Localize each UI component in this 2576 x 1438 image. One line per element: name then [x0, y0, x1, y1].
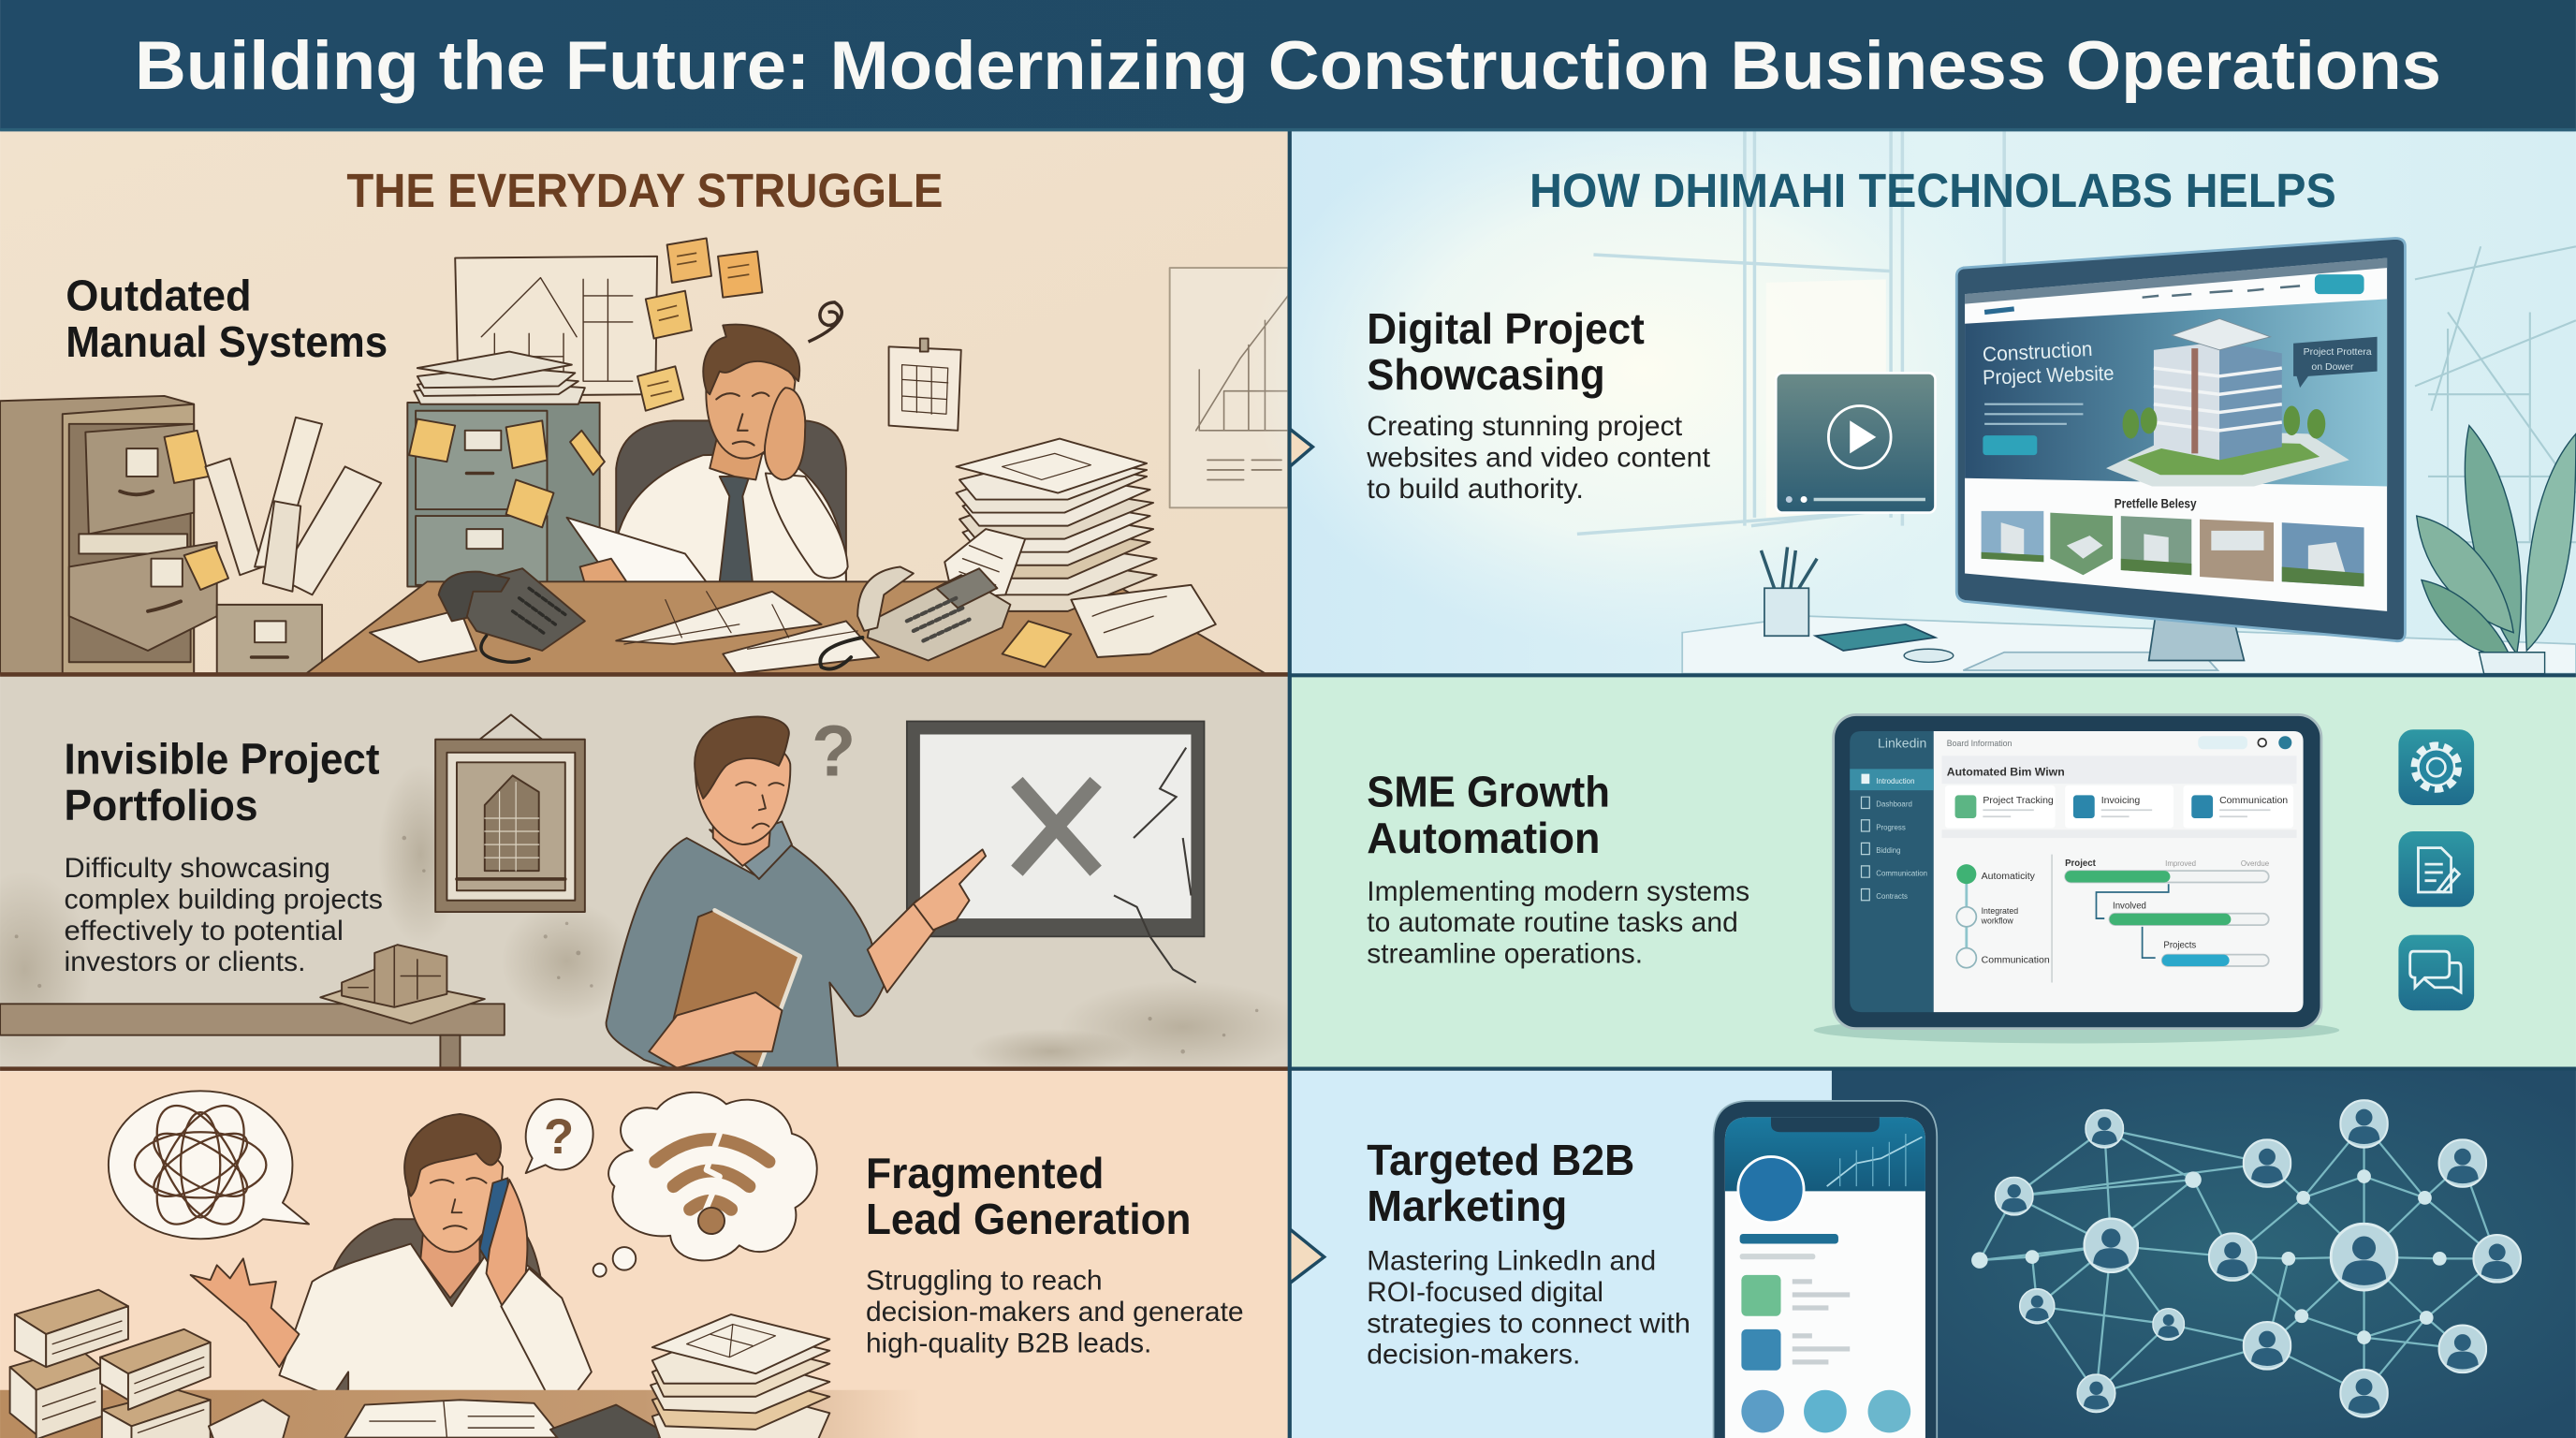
- screen: [1965, 258, 2387, 611]
- sidebar text: Dashboard: [1876, 800, 1912, 809]
- tablet dashboard: [1834, 714, 2321, 1029]
- text block: targeted b2b marketing: decision-makers.: [1367, 1340, 1580, 1371]
- rolled blueprints in a bin: [205, 418, 381, 674]
- arrow: row 1: [1290, 429, 1312, 466]
- right column dividers: [1290, 130, 2576, 1438]
- text block: targeted b2b marketing: ROI-focused digital: [1367, 1277, 1603, 1308]
- phone screen: [1725, 1117, 1925, 1438]
- text block: fragmented lead generation: decision-makers and generate: [866, 1297, 1244, 1328]
- sheet of paper and hand: [567, 518, 735, 620]
- title strip: Automated Bim Wiwn: [1947, 765, 2065, 778]
- feature cards: Communication: [2219, 795, 2288, 806]
- sticky notes on the wall: [637, 238, 762, 411]
- neck: [710, 440, 766, 479]
- lower left box: [10, 1347, 102, 1438]
- portfolio thumbnails: [1982, 511, 2364, 587]
- hair: [695, 717, 789, 799]
- sidebar text: [1850, 736, 1934, 901]
- gantt bars: Involved: [2113, 902, 2146, 912]
- holding hand: [649, 992, 782, 1068]
- worried man at desk: [567, 325, 848, 620]
- floors: [2154, 368, 2282, 431]
- heading: the everyday struggle: THE EVERYDAY STRUGGLE: [346, 164, 943, 217]
- speech tag: Project Prottera: [2304, 346, 2372, 358]
- tall paper stack: [956, 439, 1157, 611]
- text block: invisible project portfolios: Portfolios: [65, 781, 258, 829]
- mouse: [1904, 649, 1954, 662]
- timeline: Integrated: [1982, 906, 2018, 916]
- plant pot: [2479, 653, 2545, 674]
- side table with building model: [0, 945, 505, 1070]
- damp stains: [0, 764, 1306, 1075]
- text block: sme growth automation: SME Growth: [1367, 768, 1610, 816]
- header bar: [0, 0, 2576, 131]
- text block: invisible project portfolios: effectively to potential: [65, 916, 344, 946]
- text block: sme growth automation: Implementing modern systems: [1367, 876, 1749, 907]
- timeline: [1956, 855, 2052, 983]
- panel: targeted b2b marketing row 3: [1290, 1071, 1835, 1438]
- framed building picture: [435, 714, 585, 912]
- text block: targeted b2b marketing: Marketing: [1367, 1181, 1567, 1230]
- icon: document and pen: [2398, 831, 2474, 907]
- desk, row 3: [0, 1390, 920, 1438]
- tablet shadow: [1814, 1017, 2339, 1043]
- text block: sme growth automation: Automation: [1367, 814, 1600, 862]
- gantt bars: Projects: [2163, 941, 2196, 951]
- neck: [713, 805, 772, 866]
- text block: outdated manual systems: Manual Systems: [66, 317, 388, 366]
- text block: outdated manual systems: Outdated: [66, 271, 252, 320]
- cracks: [1114, 748, 1196, 983]
- face: [431, 1178, 487, 1229]
- text block: digital project showcasing: to build authority.: [1367, 474, 1584, 505]
- stand: [2149, 616, 2244, 661]
- hair: [404, 1114, 501, 1196]
- shirt: [279, 1244, 588, 1438]
- text block: digital project showcasing: Digital Project: [1367, 304, 1645, 353]
- head: [706, 357, 795, 459]
- profile banner with chart: [1725, 1117, 1925, 1191]
- text block: sme growth automation: to automate routine tasks and: [1367, 907, 1738, 938]
- shirt: [611, 453, 846, 581]
- icon: grey X: [1017, 782, 1096, 871]
- icon: stress squiggle: [809, 302, 842, 342]
- title: Building the Future: Modernizing Construction Business Operations: [135, 28, 2441, 104]
- timeline: workflow: [1981, 916, 2013, 925]
- sticky notes on cabinet: [165, 431, 228, 590]
- man on the phone: [191, 1114, 592, 1438]
- text block: targeted b2b marketing: [1367, 1136, 1690, 1371]
- paper stack on cabinet: [414, 352, 585, 404]
- panel: sme growth automation row 2: [1290, 677, 2576, 1070]
- window panes: [1766, 279, 1886, 518]
- text block: targeted b2b marketing: Targeted B2B: [1367, 1136, 1634, 1184]
- desk phone, right: [820, 566, 1010, 669]
- panel: digital project showcasing row 1: [1249, 91, 2576, 675]
- speech bubble with tangle: [109, 1091, 309, 1239]
- pointing hand: [914, 849, 986, 930]
- wall blueprint at right edge: [1170, 268, 1288, 507]
- text block: targeted b2b marketing: Mastering LinkedIn and: [1367, 1246, 1656, 1277]
- column and row dividers: [0, 674, 1288, 1069]
- frame: [1956, 238, 2405, 641]
- feature cards: Invoicing: [2101, 795, 2140, 806]
- blue phone: [480, 1178, 509, 1265]
- text block: digital project showcasing: Creating stunning project: [1367, 411, 1683, 442]
- grey filing cabinet with notes: [407, 352, 605, 587]
- icon: gear: [2398, 729, 2474, 805]
- speech tag: on Dower: [2311, 361, 2354, 373]
- feature cards: [1945, 785, 2293, 829]
- profile lines: [1740, 1234, 1910, 1432]
- desk: [304, 581, 1268, 675]
- face: [736, 782, 783, 829]
- gantt bars: Overdue: [2241, 859, 2270, 868]
- gantt bars: [2065, 858, 2270, 966]
- chair: [326, 1219, 546, 1397]
- book: [674, 910, 800, 1068]
- text block: sme growth automation: [1367, 768, 1749, 969]
- sidebar text: Introduction: [1876, 777, 1914, 785]
- filing cabinet, left: [0, 396, 228, 674]
- portfolio heading: Pretfelle Belesy: [2115, 495, 2197, 510]
- icon: broken wifi: [655, 1139, 768, 1210]
- main area: [1934, 731, 2304, 1012]
- heading: how dhimahi technolabs helps: HOW DHIMAHI TECHNOLABS HELPS: [1530, 164, 2336, 217]
- head: [695, 738, 790, 844]
- panel: everyday struggle row 1: [0, 130, 1290, 675]
- rolled plan on desk: [1071, 585, 1216, 657]
- notch: [1771, 1117, 1880, 1132]
- tablet on desk: [1815, 624, 1935, 651]
- speech tag: [2293, 337, 2378, 388]
- sidebar text: Communication: [1876, 869, 1927, 877]
- head: [407, 1144, 503, 1252]
- sleeve of raised arm: [766, 473, 848, 579]
- right upper box: [100, 1329, 211, 1410]
- phone with profile: [1714, 1101, 1937, 1438]
- raised open hand: [191, 1258, 299, 1367]
- gantt bars: Project: [2065, 858, 2097, 869]
- hero text: Project Website: [1983, 361, 2115, 389]
- text block: invisible project portfolios: Difficulty showcasing: [65, 853, 330, 884]
- hero text: [1982, 337, 2115, 389]
- raised hand: [765, 388, 805, 479]
- face: [716, 392, 768, 446]
- trees: [2123, 405, 2325, 439]
- sidebar text: Linkedin: [1878, 736, 1926, 751]
- text block: fragmented lead generation: Fragmented: [866, 1149, 1104, 1197]
- text block: digital project showcasing: [1366, 304, 1711, 505]
- timeline: Automaticity: [1982, 871, 2036, 882]
- hair: [703, 325, 799, 394]
- top drawer: [85, 424, 194, 534]
- paper plan, calculator and cards on desk: [209, 1400, 666, 1438]
- text block: sme growth automation: streamline operations.: [1367, 938, 1643, 969]
- text block: invisible project portfolios: [65, 735, 383, 977]
- keyboard: [1963, 653, 2217, 670]
- sidebar text: Progress: [1876, 823, 1906, 831]
- building faces: [2154, 342, 2219, 460]
- plot: [2106, 431, 2349, 486]
- broken screen with X: [907, 721, 1204, 983]
- icon: chat bubbles: [2398, 935, 2474, 1010]
- upper left box: [15, 1290, 128, 1367]
- sidebar text: Contracts: [1876, 892, 1908, 901]
- question speech bubble: [526, 1099, 593, 1173]
- video player: [1776, 373, 1935, 513]
- question mark: ?: [812, 711, 856, 791]
- timeline: Communication: [1982, 954, 2050, 965]
- text block: invisible project portfolios: Invisible Project: [65, 735, 379, 784]
- nav: [1984, 274, 2364, 312]
- neck: [420, 1224, 480, 1298]
- top bar: [1947, 736, 2291, 749]
- text block: digital project showcasing: websites and video content: [1366, 442, 1711, 473]
- wall calendar: [889, 339, 961, 431]
- hand and forearm to phone: [487, 1180, 559, 1328]
- question speech bubble: ?: [544, 1109, 574, 1165]
- text block: fragmented lead generation: Lead Generation: [866, 1195, 1191, 1243]
- text block: fragmented lead generation: Struggling to reach: [866, 1266, 1103, 1297]
- confused man pointing: [607, 717, 986, 1070]
- 3D building on a plot: [2106, 318, 2349, 486]
- bottom open drawer: [69, 534, 217, 651]
- sidebar: [1850, 731, 1934, 1012]
- background blueprint scaffold lines: [2415, 246, 2576, 542]
- text block: outdated manual systems: [66, 271, 388, 366]
- shirt and pointing arm: [607, 838, 884, 1070]
- separator strip: [1942, 829, 2297, 838]
- thought cloud with broken wifi: [593, 1093, 817, 1277]
- hero text: Construction: [1982, 337, 2093, 366]
- scattered blueprints on desk: [370, 592, 879, 674]
- desk with keyboard: [1682, 616, 2576, 674]
- top bar: [1965, 258, 2387, 304]
- right lower box: [102, 1390, 211, 1438]
- paper receipt: [944, 529, 1025, 598]
- wall blueprint with house sketch: [455, 257, 657, 396]
- text block: invisible project portfolios: complex building projects: [65, 885, 383, 916]
- chair: [616, 420, 846, 581]
- tie: [720, 477, 753, 581]
- roof: [2172, 318, 2271, 350]
- text block: fragmented lead generation: [866, 1149, 1244, 1358]
- pen cup: [1761, 547, 1817, 636]
- sticky notes on grey cabinet: [409, 419, 605, 527]
- hero lines and button: [1983, 404, 2083, 455]
- panel: invisible project portfolios row 2: [0, 675, 1306, 1075]
- title strip: [1942, 756, 2297, 784]
- plant: [2417, 426, 2576, 674]
- avatar: [1738, 1157, 1804, 1223]
- network graph: [1971, 1100, 2521, 1417]
- gantt bars: Improved: [2165, 859, 2196, 868]
- stacked boxes of paper: [10, 1290, 211, 1438]
- text block: digital project showcasing: Showcasing: [1367, 350, 1605, 399]
- stack of plans: [651, 1314, 829, 1438]
- desk phone, left: [439, 568, 585, 662]
- pointing forearm: [868, 901, 940, 992]
- hero image: [1965, 299, 2387, 486]
- arrow: row 3: [1290, 1229, 1325, 1284]
- panel: fragmented lead generation row 3: [0, 1071, 1290, 1438]
- text block: fragmented lead generation: high-quality B2B leads.: [866, 1328, 1151, 1358]
- sidebar text: Bidding: [1876, 846, 1901, 855]
- window frame: [1577, 131, 2004, 534]
- yellow sticky note on desk: [1003, 621, 1071, 668]
- network background: [1832, 1068, 2576, 1438]
- text block: invisible project portfolios: investors or clients.: [65, 946, 305, 977]
- raised sleeve: [501, 1269, 592, 1416]
- collar: [710, 822, 792, 879]
- feature cards: Project Tracking: [1983, 795, 2054, 806]
- text block: targeted b2b marketing: strategies to connect with: [1367, 1308, 1690, 1339]
- top bar: Board Information: [1947, 739, 2012, 748]
